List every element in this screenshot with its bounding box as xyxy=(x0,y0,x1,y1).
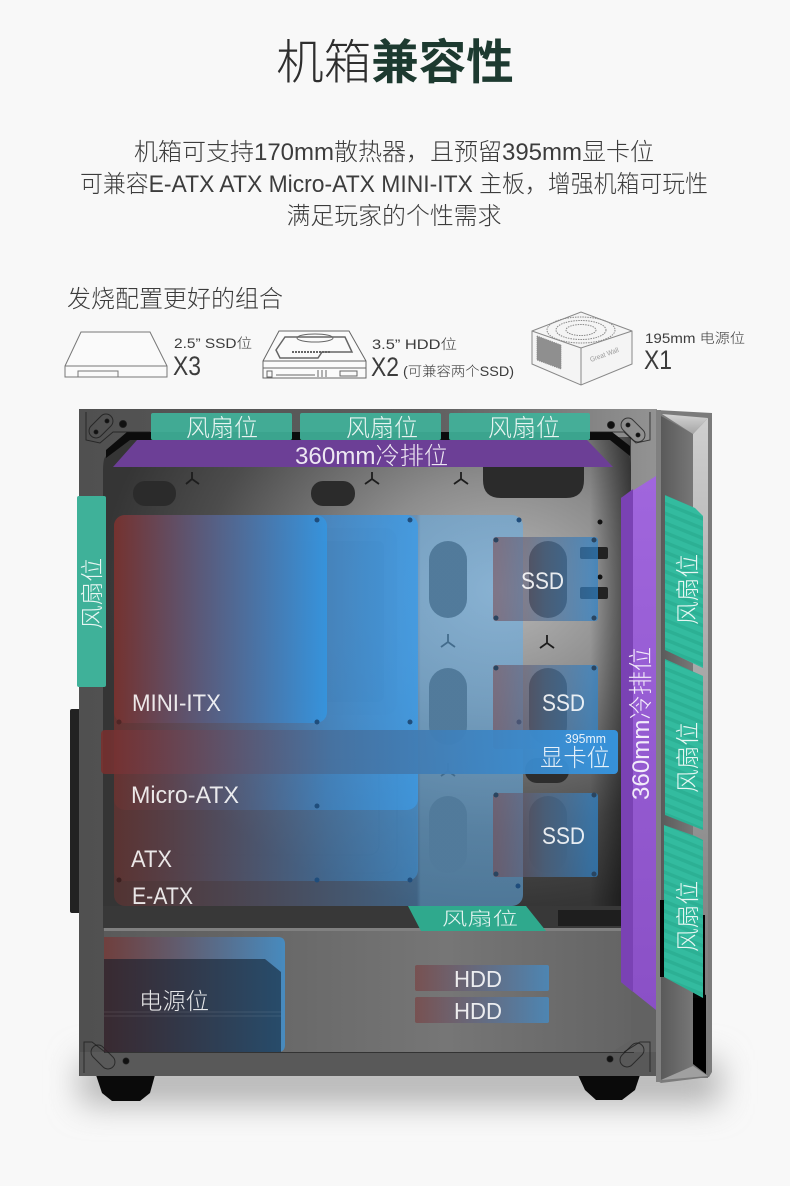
graphics card slot xyxy=(101,730,618,774)
HDD bay 2: HDD xyxy=(454,998,502,1024)
title: 机箱兼容性 xyxy=(276,37,514,90)
SSD bay 1: SSD xyxy=(521,568,564,595)
radiator position: top: 360mm冷排位 xyxy=(295,443,448,470)
icon: 3.5 inch HDD xyxy=(263,331,366,378)
E-ATX board area xyxy=(114,515,523,906)
intro paragraph xyxy=(80,139,708,230)
fan position: left xyxy=(77,496,106,687)
icon: 2.5 inch SSD xyxy=(65,332,167,377)
corner screws top xyxy=(86,411,650,445)
radiator position: front xyxy=(621,476,656,1010)
fan position: top 3 xyxy=(449,413,590,442)
fan position: front top: 风扇位 xyxy=(675,554,702,625)
fan position: left: 风扇位 xyxy=(79,558,105,629)
ATX board area xyxy=(114,515,418,881)
interior panel xyxy=(103,437,631,926)
computer case xyxy=(70,409,657,1101)
SSD capacity label: 2.5” SSD位 xyxy=(174,336,252,351)
SSD capacity label: X3 xyxy=(173,351,201,381)
PSU capacity label: X1 xyxy=(644,345,672,375)
front panel bevels xyxy=(662,414,708,434)
fan position: front middle: 风扇位 xyxy=(675,722,702,793)
graphics card slot: 395mm xyxy=(565,732,606,746)
graphics card slot: 显卡位 xyxy=(540,745,610,772)
PSU capacity label: 195mm 电源位 xyxy=(645,331,745,346)
case floor shadow xyxy=(80,1060,720,1104)
icon: power supply xyxy=(532,312,632,385)
fan position: top 2 xyxy=(300,413,441,442)
lower divider xyxy=(103,906,631,928)
board labels: Micro-ATX xyxy=(131,782,239,809)
side strip xyxy=(656,410,661,1082)
HDD capacity label: (可兼容两个SSD) xyxy=(403,364,514,379)
PSU capacity label xyxy=(644,331,745,375)
case frame xyxy=(79,409,657,1076)
case feet xyxy=(96,1075,640,1101)
tie marks xyxy=(186,472,554,776)
intro paragraph: 可兼容E-ATX ATX Micro-ATX MINI-ITX 主板，增强机箱可玩性 xyxy=(80,171,708,198)
power supply bay: 电源位 xyxy=(139,988,209,1014)
intro paragraph: 机箱可支持170mm散热器，且预留395mm显卡位 xyxy=(134,139,654,166)
SSD bay 2: SSD xyxy=(542,690,585,717)
oval cutouts xyxy=(429,520,608,873)
MINI-ITX board area xyxy=(114,515,327,723)
HDD bay 2 xyxy=(415,997,549,1024)
front panel light strip xyxy=(693,418,708,1078)
top frame band xyxy=(80,410,656,460)
fan position: bottom: 风扇位 xyxy=(442,909,518,929)
cable holes top xyxy=(133,460,584,506)
fan position: top 3: 风扇位 xyxy=(488,415,560,442)
SSD bay 3 xyxy=(493,793,598,877)
board screw dots xyxy=(116,518,522,888)
SSD bay 3: SSD xyxy=(542,823,585,850)
fan position: top 2: 风扇位 xyxy=(346,415,418,442)
board labels: E-ATX xyxy=(132,883,193,910)
motherboard tray recess xyxy=(157,528,397,873)
fan position: bottom xyxy=(408,906,546,931)
radiator position: top xyxy=(113,440,613,470)
board labels: MINI-ITX xyxy=(132,690,221,717)
HDD capacity label: X2 xyxy=(371,352,399,382)
fan position: front top xyxy=(665,495,703,668)
subheading: configuration: 发烧配置更好的组合 xyxy=(67,286,283,313)
rear port strip xyxy=(70,709,82,913)
fan position: top 1: 风扇位 xyxy=(186,415,258,442)
fan position: front bottom xyxy=(664,825,703,998)
SSD bay 1 xyxy=(493,537,598,621)
HDD capacity label: 3.5” HDD位 xyxy=(372,337,457,352)
front panel door xyxy=(661,416,693,1080)
bottom frame xyxy=(80,1052,657,1076)
fan position: top 1 xyxy=(151,413,292,442)
HDD bay 1: HDD xyxy=(454,966,502,992)
SSD mount dots xyxy=(494,538,596,876)
board labels xyxy=(131,690,239,910)
fan position: front bottom: 风扇位 xyxy=(675,881,702,952)
HDD capacity label xyxy=(371,337,514,382)
fan position: front middle xyxy=(665,659,703,830)
icon: power supply: Great Wall xyxy=(589,347,620,364)
PSU shroud xyxy=(104,928,631,1052)
HDD bay 1 xyxy=(415,965,549,992)
corner screws bottom xyxy=(84,1040,650,1073)
front panel xyxy=(656,410,712,1083)
intro paragraph: 满足玩家的个性需求 xyxy=(286,203,502,230)
SSD capacity label xyxy=(173,336,252,381)
SSD bay 2 xyxy=(493,665,598,749)
power supply bay xyxy=(104,937,285,1052)
radiator position: front: 360mm冷排位 xyxy=(628,647,655,800)
board labels: ATX xyxy=(131,846,172,873)
Micro-ATX board area xyxy=(114,515,418,810)
lower black gap xyxy=(693,990,706,1074)
